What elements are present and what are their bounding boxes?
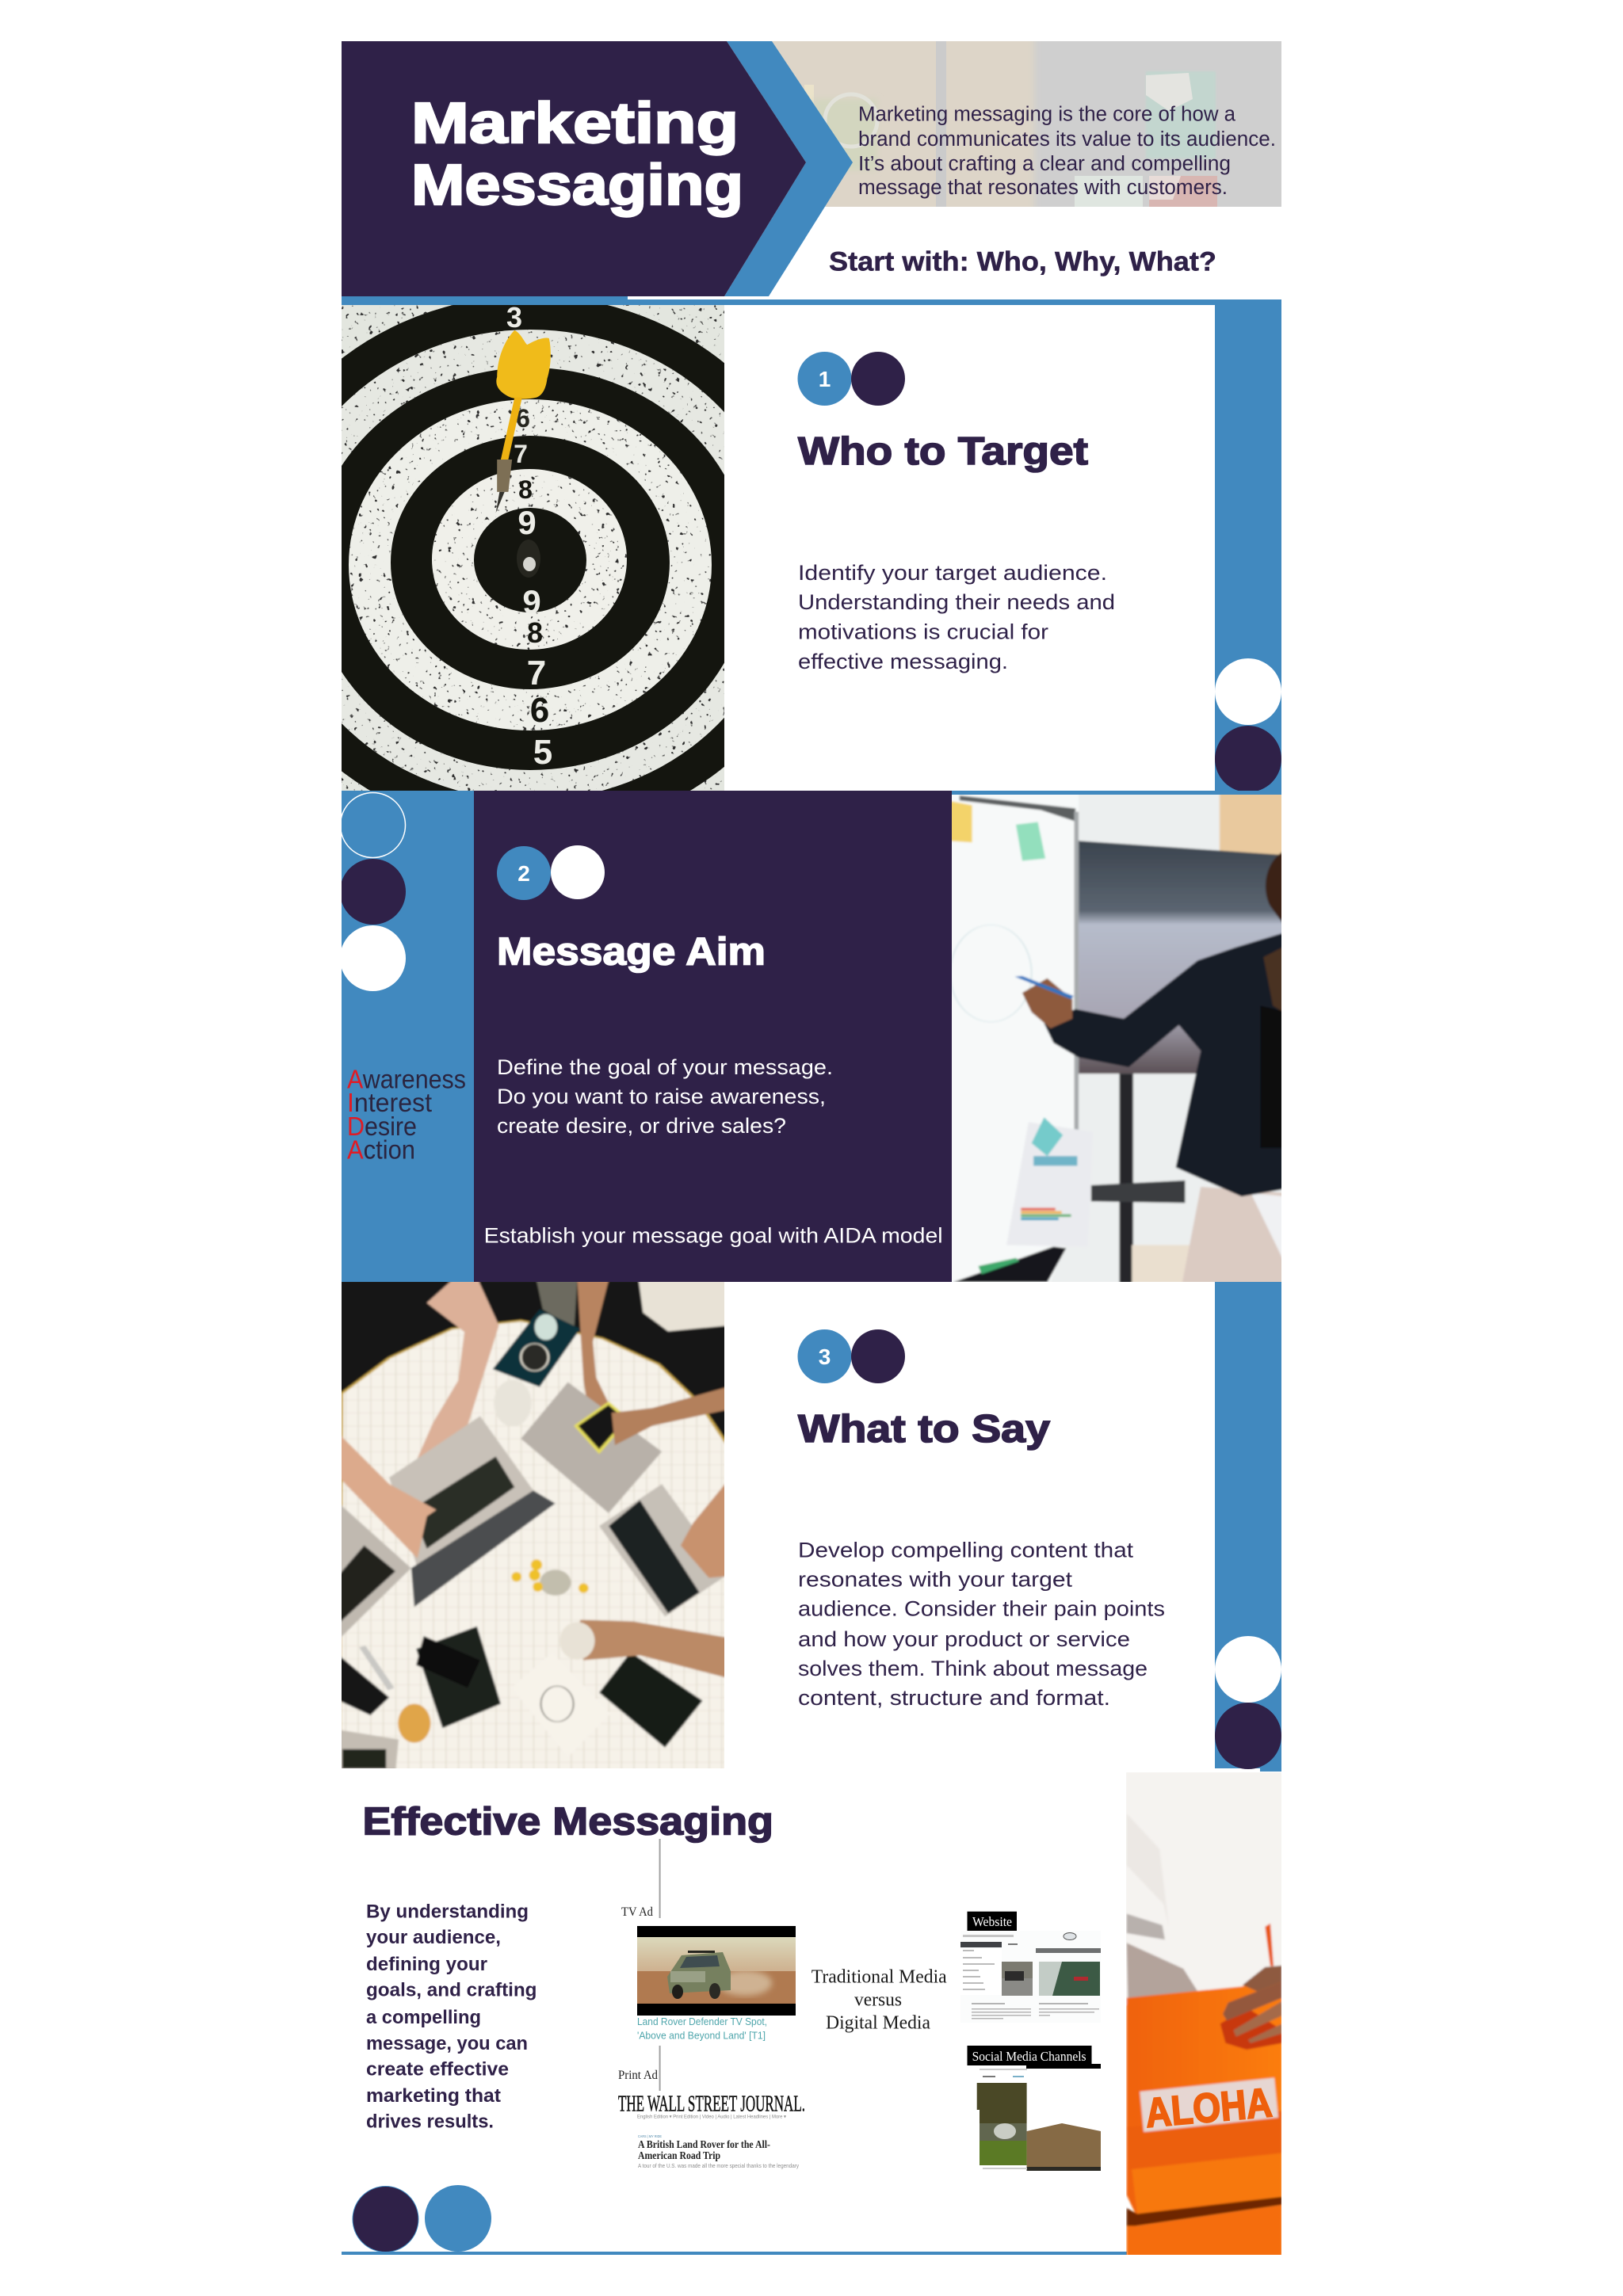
dartboard numbers: 9 xyxy=(522,583,541,620)
summary text: marketing that xyxy=(366,2085,501,2107)
summary text xyxy=(366,1901,537,2133)
body text: motivations is crucial for xyxy=(798,620,1048,643)
TV ad label: TV Ad xyxy=(621,1905,653,1919)
team at table photo xyxy=(339,1280,727,1772)
summary text: your audience, xyxy=(366,1927,501,1948)
dartboard numbers: 9 xyxy=(517,504,537,541)
purple text panel xyxy=(474,791,952,1282)
title: Messaging xyxy=(411,154,743,217)
decorative circle white xyxy=(1215,1636,1281,1703)
dartboard numbers: 6 xyxy=(516,404,530,433)
print ad clipping: A British Land Rover for the All- xyxy=(638,2138,770,2150)
AIDA list: Desire xyxy=(347,1112,417,1141)
heading: Who to Target xyxy=(798,430,1088,473)
step number 1: 1 xyxy=(819,367,831,391)
dartboard numbers: 7 xyxy=(527,654,546,692)
photo top rule xyxy=(952,791,1281,795)
panel: effective messaging xyxy=(342,1772,1284,2256)
decorative circle white xyxy=(1215,658,1281,725)
dartboard numbers: 7 xyxy=(514,440,528,468)
TV ad label xyxy=(621,1839,661,1919)
right blue strip xyxy=(1215,299,1281,795)
dartboard numbers xyxy=(506,301,552,772)
header background photo xyxy=(761,41,1281,207)
print ad clipping: A tour of the U.S. was made all the more special thanks to the legendary xyxy=(638,2164,799,2169)
header intro text xyxy=(858,104,1276,199)
social media label xyxy=(967,2046,1101,2069)
summary text: drives results. xyxy=(366,2111,494,2133)
header intro text: message that resonates with customers. xyxy=(858,177,1228,199)
white text panel xyxy=(724,1282,1215,1768)
body text: create desire, or drive sales? xyxy=(497,1114,786,1138)
AIDA list: Awareness xyxy=(347,1065,466,1094)
body text: and how your product or service xyxy=(798,1627,1130,1651)
website label xyxy=(967,1912,1017,1931)
body text: audience. Consider their pain points xyxy=(798,1597,1165,1621)
header intro text: It’s about crafting a clear and compelling xyxy=(858,153,1231,175)
media comparison text: versus xyxy=(854,1990,902,2011)
media comparison text xyxy=(812,1967,947,2034)
title xyxy=(411,92,743,217)
summary text: goals, and crafting xyxy=(366,1980,537,2001)
summary text: By understanding xyxy=(366,1901,529,1922)
blue chevron xyxy=(724,41,853,296)
header intro text: Marketing messaging is the core of how a xyxy=(858,104,1236,126)
ALOHA lettering: ALOHA xyxy=(1144,2080,1274,2137)
title: Marketing xyxy=(411,92,739,155)
dart xyxy=(496,330,551,513)
body text: resonates with your target xyxy=(798,1567,1073,1591)
body text: Define the goal of your message. xyxy=(497,1055,833,1079)
print ad clipping: English Edition ▾ Print Edition | Video | Audio | Latest Headlines | More ▾ xyxy=(637,2114,787,2120)
body text xyxy=(798,1539,1165,1710)
summary text: create effective xyxy=(366,2059,509,2081)
summary text: message, you can xyxy=(366,2033,528,2054)
dartboard numbers: 5 xyxy=(533,733,552,772)
shopping bag photo xyxy=(1125,1772,1284,2256)
body text: Identify your target audience. xyxy=(798,561,1107,585)
decorative circles xyxy=(340,792,406,991)
step number 3: 3 xyxy=(819,1344,831,1369)
heading: What to Say xyxy=(798,1408,1050,1451)
website label: Website xyxy=(972,1914,1012,1929)
dartboard numbers: 6 xyxy=(530,691,549,730)
TV ad caption: Land Rover Defender TV Spot, xyxy=(637,2016,767,2027)
dartboard numbers: 8 xyxy=(518,475,533,504)
website screenshot xyxy=(960,1931,1101,2023)
body text xyxy=(497,1055,833,1138)
subheading: Start with: Who, Why, What? xyxy=(829,247,1216,277)
AIDA list: Interest xyxy=(347,1088,432,1117)
step number 2 xyxy=(497,845,605,900)
decorative circle dark xyxy=(1215,1703,1281,1769)
left blue column xyxy=(342,791,474,1282)
step number 1 xyxy=(797,352,905,406)
print ad clipping: CARS | MY RIDE xyxy=(638,2134,662,2138)
body text: effective messaging. xyxy=(798,650,1008,673)
print ad clipping: THE WALL STREET JOURNAL. xyxy=(618,2092,805,2117)
summary text: defining your xyxy=(366,1954,487,1975)
AIDA list xyxy=(347,1065,466,1165)
panel: who to target xyxy=(342,305,1281,791)
purple title banner xyxy=(342,41,806,296)
step number 2: 2 xyxy=(517,861,530,886)
body text: solves them. Think about message xyxy=(798,1657,1148,1680)
decorative circle dark xyxy=(353,2187,418,2252)
decorative circle dark xyxy=(1215,726,1281,792)
header intro text: brand communicates its value to its audience. xyxy=(858,128,1276,151)
step number 3 xyxy=(797,1329,905,1383)
body text: content, structure and format. xyxy=(798,1686,1110,1710)
decorative circle blue xyxy=(425,2185,491,2252)
header panel xyxy=(342,32,1281,305)
AIDA caption: Establish your message goal with AIDA model xyxy=(484,1224,943,1248)
media comparison text: Traditional Media xyxy=(812,1967,947,1988)
right blue strip xyxy=(1215,1282,1281,1772)
dartboard numbers: 8 xyxy=(527,616,543,649)
print ad clipping: American Road Trip xyxy=(638,2149,720,2161)
TV ad caption xyxy=(637,2016,767,2041)
body text: Develop compelling content that xyxy=(798,1539,1134,1562)
whiteboard presenter photo xyxy=(947,789,1292,1287)
social media label: Social Media Channels xyxy=(972,2049,1086,2064)
header divider bar xyxy=(342,296,1281,305)
dartboard numbers: 3 xyxy=(506,301,522,334)
AIDA list: Action xyxy=(347,1135,415,1165)
white text panel xyxy=(724,305,1215,791)
body text: Do you want to raise awareness, xyxy=(497,1085,826,1108)
heading: Message Aim xyxy=(497,930,766,973)
social media screenshots xyxy=(977,2069,1101,2171)
body text xyxy=(798,561,1115,673)
summary text: a compelling xyxy=(366,2007,481,2028)
media comparison text: Digital Media xyxy=(826,2013,930,2034)
TV ad screenshot xyxy=(637,1926,796,2016)
print ad label xyxy=(618,2046,661,2091)
dartboard photo xyxy=(342,305,724,791)
TV ad caption: 'Above and Beyond Land' [T1] xyxy=(637,2030,766,2041)
panel: message aim xyxy=(340,789,1292,1287)
bottom rule xyxy=(342,2252,1127,2255)
print ad label: Print Ad xyxy=(618,2069,658,2082)
heading: Effective Messaging xyxy=(363,1800,773,1843)
body text: Understanding their needs and xyxy=(798,590,1115,614)
print ad clipping xyxy=(618,2092,805,2169)
panel: what to say xyxy=(339,1280,1281,1772)
